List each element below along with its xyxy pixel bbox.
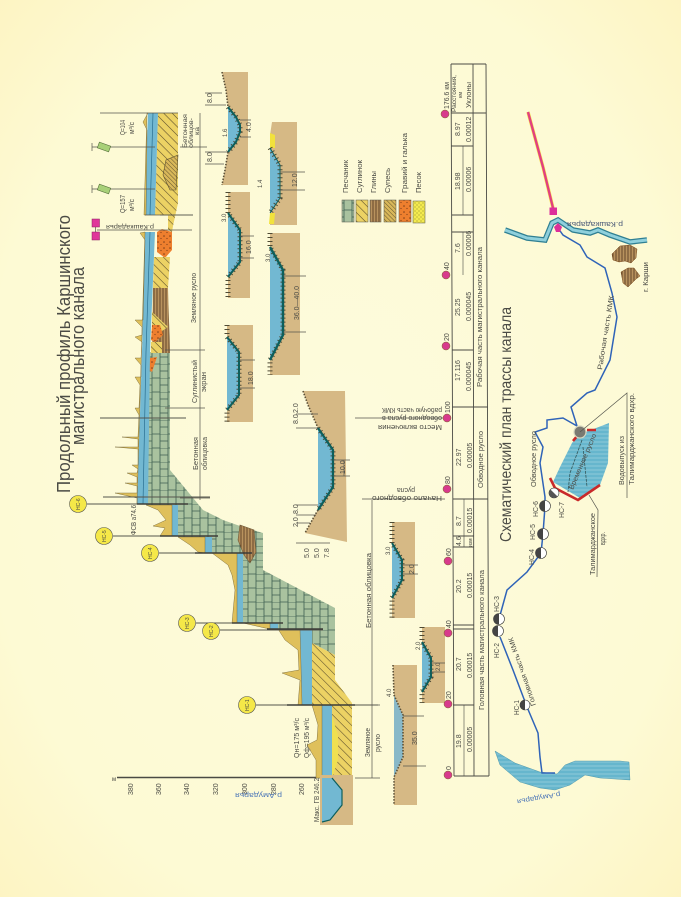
pumping station marker НС-2 <box>202 622 323 640</box>
distance values: 4.6 <box>456 536 463 546</box>
flow labels downstream <box>294 718 311 758</box>
longitudinal profile chart <box>70 113 382 825</box>
dimension lines and lining labels upper: ка <box>194 127 201 135</box>
dimension lines and lining labels lower <box>355 500 382 778</box>
slope values: 0.00006 <box>466 231 473 256</box>
callout: bypass connection point: Место включения <box>378 423 442 430</box>
label: working section: Рабочая часть КМК <box>596 294 616 370</box>
cross-section 6: 7.8 <box>324 548 331 558</box>
distance values: 20.7 <box>456 657 463 671</box>
flow label Q=157: Q=157 <box>120 195 127 213</box>
geology: lower loam <box>312 643 352 778</box>
elevation axis: 380 <box>128 783 135 795</box>
distance values: 18.98 <box>455 172 462 190</box>
river Kashkadarya label on profile: р.Кашкадарья <box>105 223 154 230</box>
callout: bypass connection point <box>355 406 443 430</box>
station НС-3 <box>494 596 504 624</box>
elevation axis: 360 <box>156 783 163 795</box>
slope values: изм <box>468 538 474 547</box>
label: Kashkadarya on map: р.Кашкадарья <box>567 220 623 227</box>
river Amu Darya cross-section <box>320 775 353 825</box>
cross-section 9: 4.0 <box>387 688 393 697</box>
distance values: 25.25 <box>455 298 462 316</box>
cross-section 1: 8.0 <box>207 93 214 103</box>
cross-section 5 <box>266 233 306 375</box>
slope values: 0.00005 <box>467 443 474 468</box>
legend item: sandy loam: Супесь <box>385 168 392 193</box>
kilometre markers: 40 <box>444 262 451 270</box>
callout: start of bypass channel: Начало обводного <box>372 494 442 502</box>
cross-section 6 <box>293 391 350 558</box>
pumping station marker НС-1 <box>238 696 378 714</box>
cross-section 6: 8.0 <box>293 504 300 514</box>
slope values: 0.00015 <box>467 573 474 598</box>
cross-section 1: 1.6 <box>223 128 229 137</box>
elevation axis: 300 <box>242 783 249 795</box>
station НС-5 <box>530 524 548 540</box>
pump stations on the map <box>492 488 566 715</box>
geology: clay lens <box>238 525 256 563</box>
kilometre markers <box>441 82 453 779</box>
cross-section 6: 10.0 <box>340 460 347 474</box>
distance values: 22.97 <box>456 448 463 466</box>
Talimarjan reservoir: Временное русло <box>568 433 598 491</box>
level label: max water level: Макс. ГВ 246.2 <box>314 778 321 822</box>
dimension lines and lining labels upper: Бетонная <box>182 113 189 148</box>
vertical reference lines <box>100 418 210 497</box>
cross-section 2: 16.0 <box>246 240 253 254</box>
distance values: 7.6 <box>455 243 462 253</box>
cross-section 8: 2.0 <box>436 662 442 671</box>
legend <box>342 133 425 223</box>
schematic route map <box>492 112 650 805</box>
table grid <box>451 64 489 776</box>
canal water steps <box>137 113 332 778</box>
slope values: 0.00006 <box>466 167 473 192</box>
legend item: gravel and pebble: Гравий и галька <box>401 133 409 193</box>
leader and label: outlet from reservoir <box>580 393 636 498</box>
leader and label: Talimarjan reservoir <box>589 495 607 577</box>
pumping station marker НС-3 <box>178 614 283 632</box>
section names: Рабочая часть магистрального канала <box>476 247 484 387</box>
river crossing markers <box>92 215 193 240</box>
dimension lines and lining labels upper <box>160 113 210 500</box>
slope values: 0.00005 <box>467 727 474 752</box>
geology: clay <box>152 288 170 353</box>
cross-section 5: 3.0 <box>266 253 272 262</box>
cross-section 2: 3.0 <box>222 213 228 222</box>
slope values <box>466 117 474 752</box>
kilometre markers: 20 <box>446 691 453 699</box>
leader and label: Talimarjan reservoir: Талимарджанское <box>590 513 597 575</box>
section names: Головная часть магистрального канала <box>479 570 486 710</box>
continuation pink line <box>528 112 553 208</box>
flow label Q=104: Q=104 <box>120 120 127 135</box>
cross-section 8 <box>416 627 445 703</box>
pumping station marker НС-3: НС-3 <box>185 617 191 629</box>
cross-section 4: 1.4 <box>258 179 264 188</box>
cross-section 6: 5.0 <box>304 548 311 558</box>
magenta structures at river crossing <box>550 208 562 232</box>
cross-section 1: 4.0 <box>246 122 253 132</box>
pumping station marker НС-5: НС-5 <box>102 530 108 542</box>
station НС-6: НС-6 <box>533 501 540 517</box>
terrain surface and embankments <box>115 113 322 778</box>
geology: gravel and loam lenses <box>149 312 168 372</box>
leader and label: Talimarjan reservoir: вдхр. <box>600 532 607 545</box>
cross-section 3: 18.0 <box>248 371 255 385</box>
table header: Расстояния, <box>452 75 458 112</box>
title: longitudinal profile <box>54 215 88 493</box>
cross-section 3 <box>227 325 255 422</box>
station НС-4: НС-4 <box>529 549 536 565</box>
gauge markers upstream <box>92 113 178 194</box>
station НС-6 <box>533 500 550 517</box>
slope values: 0.000045 <box>466 362 473 391</box>
legend item: clay: Глины <box>371 171 378 193</box>
dimension lines and lining labels upper: облицовка <box>201 437 209 470</box>
label: bypass channel: Обводное русло <box>530 431 538 487</box>
kilometre markers: 80 <box>445 476 452 484</box>
geology: sandy loam lens <box>163 155 178 190</box>
dimension lines and lining labels upper: облицов- <box>187 118 195 148</box>
cross-section 4 <box>258 122 305 225</box>
pumping station marker НС-4 <box>142 544 252 562</box>
city of Karshi: г. Карши <box>643 262 650 292</box>
dimension lines and lining labels upper: Суглинистый <box>191 360 199 403</box>
outlet structure <box>574 426 586 438</box>
cross-section 9: 35.0 <box>412 731 419 745</box>
pumping station marker НС-5 <box>96 528 218 544</box>
kilometre markers: 100 <box>445 401 452 413</box>
pumping station marker НС-2: НС-2 <box>209 625 215 637</box>
data table: distances and slopes <box>451 64 489 776</box>
callout: start of bypass channel <box>362 486 445 502</box>
flow label Q=104 <box>120 120 136 135</box>
station НС-1 <box>514 700 530 715</box>
geology: gravel lens upper <box>157 229 172 258</box>
river Kashkadarya <box>505 220 647 242</box>
canal route head section <box>499 418 577 773</box>
pumping station marker НС-6 <box>70 496 188 512</box>
distance values: 19.8 <box>456 734 463 748</box>
title: longitudinal profile: Продольный профиль Каршинского <box>54 215 74 493</box>
cross-section 1 <box>205 72 253 185</box>
distance values: 8.97 <box>455 122 462 136</box>
station НС-2 <box>492 626 504 658</box>
flow labels downstream: Qф=195 м³/с <box>304 718 311 758</box>
elevation axis: 280 <box>271 783 278 795</box>
flow label Q=104: м³/с <box>129 122 136 134</box>
dimension lines and lining labels lower: Бетонная облицовка <box>365 553 373 628</box>
callout: bypass connection point: рабочую часть КМК <box>381 406 442 414</box>
slope values: 0.00015 <box>467 508 474 533</box>
legend item: sand: Песок <box>416 171 423 193</box>
kilometre markers: 40 <box>446 620 453 628</box>
callout: bypass connection point: обводного русла в <box>382 414 442 422</box>
slope values: 0.000045 <box>466 292 473 321</box>
geology: sand lens <box>332 716 338 778</box>
station НС-7 <box>547 488 566 518</box>
cross-section 6: 8.0 <box>293 414 300 424</box>
station НС-1: НС-1 <box>514 700 521 715</box>
cross-section 4: 12.0 <box>292 173 299 187</box>
distance values: 8.7 <box>456 516 463 526</box>
cross-section 7 <box>386 522 418 618</box>
label: Amu Darya on map: р.Амударья <box>516 790 561 805</box>
legend item: loam: Суглинок <box>357 159 364 193</box>
cross-section 6: 5.0 <box>314 548 321 558</box>
dimension lines and lining labels lower: Земляное <box>365 728 372 757</box>
legend item: sandstone: Песчаник <box>343 159 350 193</box>
geology: loam middle <box>153 257 170 288</box>
callout: start of bypass channel: русла <box>397 486 415 493</box>
leader and label: outlet from reservoir: Водовыпуск из <box>619 436 626 485</box>
distance values: 20.2 <box>456 579 463 593</box>
cross-section 7: 2.0 <box>409 564 416 574</box>
label: head section: Головная часть КМК <box>508 635 538 707</box>
kilometre markers: 20 <box>444 333 451 341</box>
pumping station marker НС-4: НС-4 <box>148 547 154 559</box>
elevation axis <box>112 777 332 795</box>
station НС-2: НС-2 <box>494 643 501 658</box>
pumping station marker НС-6: НС-6 <box>76 498 82 510</box>
kilometre markers: 60 <box>446 548 453 556</box>
section names <box>476 247 486 710</box>
cross-section 2 <box>222 192 254 298</box>
schematic plan title: Схематический план трассы канала <box>498 307 515 542</box>
station НС-5: НС-5 <box>530 524 537 540</box>
cross-section 6: 2.0 <box>293 403 300 413</box>
title: longitudinal profile: магистрального канала <box>68 266 88 445</box>
river Amu Darya <box>495 751 630 790</box>
canal route working section <box>558 228 617 426</box>
Talimarjan reservoir <box>550 423 609 500</box>
dimension lines and lining labels upper: Бетонная <box>193 437 200 470</box>
leader and label: outlet from reservoir: Талимарджанского вдхр. <box>629 393 636 485</box>
flow labels downstream: Qн=175 м³/с <box>294 718 301 758</box>
elevation axis: 320 <box>213 783 220 795</box>
geology: sandstone <box>146 352 335 655</box>
table header: км <box>458 92 464 98</box>
cross-section 1: 8.0 <box>207 152 214 162</box>
dimension lines and lining labels upper: Земляное русло <box>191 273 198 323</box>
cross-section 8: 2.0 <box>416 641 422 650</box>
city of Karshi <box>612 245 650 292</box>
station НС-7: НС-7 <box>559 502 566 518</box>
dimension lines and lining labels lower: русло <box>375 734 382 752</box>
kilometre markers: 0 <box>446 766 453 770</box>
pumping station marker НС-1: НС-1 <box>245 699 251 711</box>
cross-section 7: 3.0 <box>386 546 392 555</box>
distance values <box>455 122 463 748</box>
flow label Q=157 <box>120 195 136 213</box>
kilometre markers: 176.6 км <box>444 82 451 109</box>
table header: Уклоны <box>466 82 473 108</box>
section names: Обводное русло <box>477 431 485 488</box>
elevation axis: 260 <box>299 783 306 795</box>
cross-section 9 <box>387 665 426 805</box>
elevation axis: м <box>112 777 116 783</box>
cross-section 6: 2.0 <box>293 517 300 527</box>
slope values: 0.00012 <box>466 117 473 142</box>
slope values: 0.00015 <box>467 653 474 678</box>
flow label Q=157: м³/с <box>129 199 136 211</box>
distance values: 17.116 <box>455 360 462 381</box>
station НС-3: НС-3 <box>494 596 501 612</box>
table header <box>452 75 473 112</box>
dimension lines and lining labels upper: экран <box>201 372 208 392</box>
level label: forced water level: ФСВ а74.6 <box>131 505 138 535</box>
cross-section 5: 36.0—40.0 <box>294 286 301 320</box>
geology: upper loam <box>155 113 178 232</box>
station НС-4 <box>529 548 546 565</box>
elevation axis: 340 <box>184 783 191 795</box>
label: Amu Darya river: р.Амударья <box>235 791 282 798</box>
